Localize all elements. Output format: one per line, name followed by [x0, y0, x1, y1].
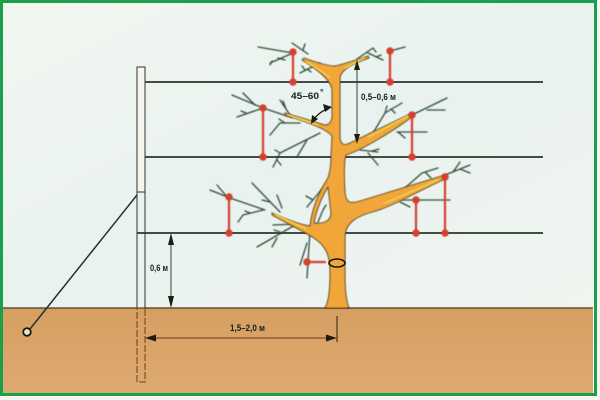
lower right shoots [392, 162, 470, 207]
label: degree sign: ° [320, 87, 324, 97]
trellis wires [137, 82, 543, 233]
thin shoots [210, 43, 470, 278]
trellis post [137, 67, 145, 382]
background sky [0, 0, 600, 308]
label: first wire height: 0,6 м [150, 263, 168, 273]
horizontal spacing arrow 1.5-2.0 m [145, 316, 337, 342]
lower centre shoots [300, 183, 327, 278]
tree trunk and branches [272, 56, 445, 308]
trunk tie ring [329, 259, 345, 267]
vertical height arrow 0.6 m [168, 233, 174, 308]
ground [0, 308, 593, 394]
label: post spacing: 1,5–2,0 м [230, 323, 265, 333]
label: wire spacing: 0,5–0,6 м [361, 92, 396, 102]
yellow highlights on branches [276, 58, 438, 229]
top right shoots [357, 47, 405, 60]
label: angle: 45–60 [291, 91, 319, 101]
middle right shoots [360, 98, 447, 165]
middle left shoots [232, 93, 320, 167]
brace wire and anchor [23, 195, 137, 336]
angle arrow 45-60 degrees [311, 104, 332, 124]
lower left shoots [210, 183, 297, 247]
vertical spacing arrow 0.5-0.6 m [354, 60, 360, 144]
ground line [3, 307, 593, 309]
red tie strings [226, 48, 448, 265]
branch tips [230, 108, 290, 210]
top left shoots [258, 43, 320, 73]
